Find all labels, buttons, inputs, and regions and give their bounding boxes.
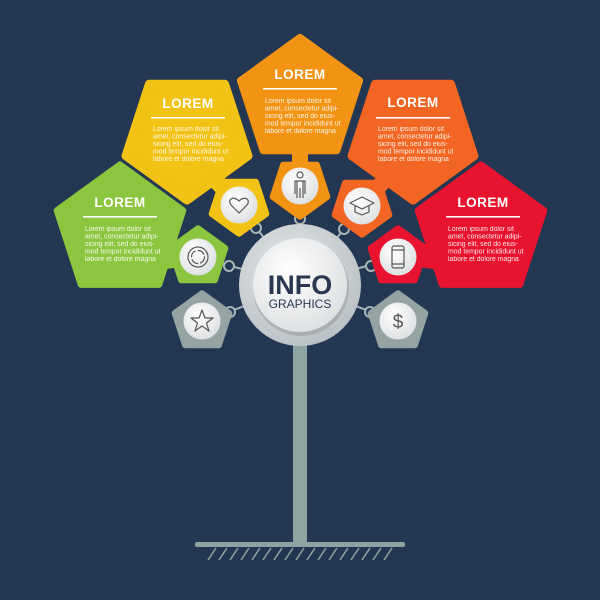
panel: red: labore et dolore magna — [448, 256, 519, 263]
icon: dollar (gray) — [371, 294, 425, 345]
icon: phone (red) — [371, 229, 425, 280]
panel: red: mod tempor incididunt ut — [448, 248, 524, 256]
panel: green: mod tempor incididunt ut — [85, 248, 161, 256]
panel: orange: sicing elit, sed do eius- — [265, 113, 335, 120]
panel: orange-red: Lorem ipsum dolor sit — [378, 126, 444, 133]
panel: yellow: labore et dolore magna — [153, 156, 224, 163]
icon: dollar (gray): $ — [393, 312, 404, 333]
icon: target (green) — [171, 229, 225, 280]
panel: orange-red — [352, 84, 474, 203]
panel: red: Lorem ipsum dolor sit — [448, 226, 514, 233]
icon: heart (yellow) — [212, 182, 266, 233]
icon: star (gray) — [175, 294, 229, 345]
panel: yellow: Lorem ipsum dolor sit — [153, 126, 219, 133]
panel: yellow: sicing elit, sed do eius- — [153, 141, 223, 148]
panel: red: LOREM — [457, 195, 509, 210]
panel: orange-red: LOREM — [387, 95, 439, 110]
title: INFO — [268, 270, 332, 300]
center circle: GRAPHICS — [269, 297, 331, 311]
panel: red: sicing elit, sed do eius- — [448, 241, 518, 248]
panel: orange: mod tempor incididunt ut — [265, 120, 341, 128]
center circle — [239, 224, 361, 346]
panel: green — [57, 165, 192, 284]
panel: green: labore et dolore magna — [85, 256, 156, 263]
panel: orange: LOREM — [274, 67, 326, 82]
panel: yellow: amet, consectetur adipi- — [153, 134, 227, 140]
stem — [195, 330, 405, 560]
panel: green: amet, consectetur adipi- — [85, 234, 159, 240]
panel: green: sicing elit, sed do eius- — [85, 241, 155, 248]
panel: yellow: LOREM — [162, 96, 214, 111]
panel: green: Lorem ipsum dolor sit — [85, 226, 151, 233]
icon: graduation cap (orange-red) — [335, 183, 389, 234]
panel: orange: Lorem ipsum dolor sit — [265, 98, 331, 105]
panel: green: LOREM — [94, 195, 146, 210]
panel: orange-red: sicing elit, sed do eius- — [378, 141, 448, 148]
panel: orange — [241, 38, 359, 180]
connectors — [198, 188, 398, 322]
panel: red: amet, consectetur adipi- — [448, 234, 522, 240]
icon: person (orange) — [273, 165, 327, 216]
panel: orange: amet, consectetur adipi- — [265, 106, 339, 112]
panel: orange-red: amet, consectetur adipi- — [378, 134, 452, 140]
panel: red — [405, 165, 544, 284]
panel: yellow — [126, 84, 248, 203]
panel: yellow: mod tempor incididunt ut — [153, 148, 229, 156]
panel: orange-red: labore et dolore magna — [378, 156, 449, 163]
panel: orange-red: mod tempor incididunt ut — [378, 148, 454, 156]
panel: orange: labore et dolore magna — [265, 128, 336, 135]
